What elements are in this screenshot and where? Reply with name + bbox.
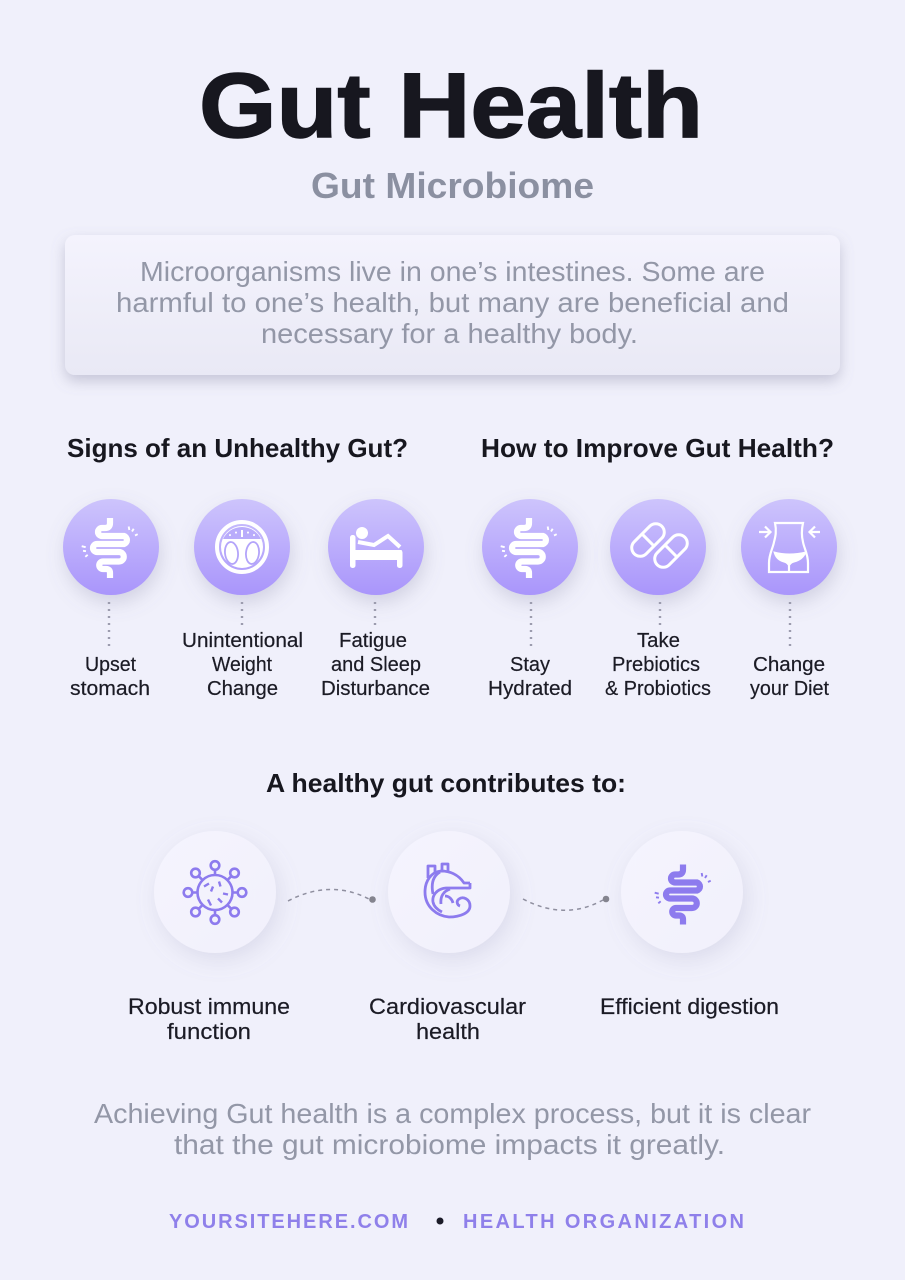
footer: [169, 1211, 744, 1233]
arrow: heart to digestion: [523, 896, 609, 910]
item: weight change: Unintentional: [182, 630, 303, 652]
icon: intestine: [501, 518, 557, 578]
item: fatigue: [321, 499, 430, 700]
conclusion text: that the gut microbiome impacts it greatly.: [174, 1129, 725, 1160]
item: immune function: function: [167, 1019, 251, 1044]
conclusion text: Achieving Gut health is a complex process, but it is clear: [94, 1098, 811, 1129]
item: immune function: [128, 831, 290, 1044]
conclusion text: [94, 1098, 811, 1160]
icon: virus: [184, 861, 246, 924]
item: prebiotics: & Probiotics: [605, 678, 711, 700]
icon: scale: [217, 522, 267, 572]
item: weight change: [182, 499, 303, 700]
item: upset stomach: [63, 499, 159, 700]
item: weight change: Weight: [212, 654, 272, 676]
item: prebiotics: [605, 499, 711, 700]
item: stay hydrated: Hydrated: [488, 678, 572, 700]
item: prebiotics: Take: [637, 630, 680, 652]
item: fatigue: and Sleep: [331, 654, 421, 676]
item: digestion: [600, 831, 779, 1019]
item: upset stomach: Upset: [85, 654, 136, 676]
item: weight change: Change: [207, 678, 278, 700]
item: cardiovascular: Cardiovascular: [369, 994, 526, 1019]
item: change diet: [741, 499, 837, 700]
icon: pills: [628, 520, 691, 571]
footer: YOURSITEHERE.COM: [169, 1211, 408, 1233]
heading: contributes: A healthy gut contributes to:: [266, 768, 626, 798]
subtitle: Gut Microbiome: [311, 165, 594, 206]
item: upset stomach: stomach: [70, 678, 150, 700]
title: Gut Health: [199, 55, 703, 157]
item: change diet: Change: [753, 654, 825, 676]
footer: HEALTH ORGANIZATION: [463, 1211, 744, 1233]
icon: waist: [759, 523, 820, 572]
item: immune function: Robust immune: [128, 994, 290, 1019]
panel: intro: [65, 235, 840, 375]
heading: signs: Signs of an Unhealthy Gut?: [67, 433, 408, 463]
item: fatigue: Disturbance: [321, 678, 430, 700]
panel: intro: Microorganisms live in one’s intestines. Some are: [140, 256, 765, 287]
heading: improve: How to Improve Gut Health?: [481, 433, 834, 463]
item: prebiotics: Prebiotics: [612, 654, 700, 676]
item: cardiovascular: health: [416, 1019, 480, 1044]
item: digestion: Efficient digestion: [600, 994, 779, 1019]
icon: bed: [350, 527, 402, 568]
icon: intestine: [655, 864, 711, 924]
item: cardiovascular: [369, 831, 526, 1044]
icon: intestine: [82, 518, 138, 578]
item: stay hydrated: [482, 499, 578, 700]
arrow: immune to heart: [288, 889, 376, 903]
icon: heart: [425, 864, 470, 917]
item: stay hydrated: Stay: [510, 654, 550, 676]
panel: intro: harmful to one’s health, but many are beneficial and: [116, 287, 789, 318]
panel: intro: necessary for a healthy body.: [261, 318, 638, 349]
item: fatigue: Fatigue: [339, 630, 407, 652]
item: change diet: your Diet: [750, 678, 829, 700]
